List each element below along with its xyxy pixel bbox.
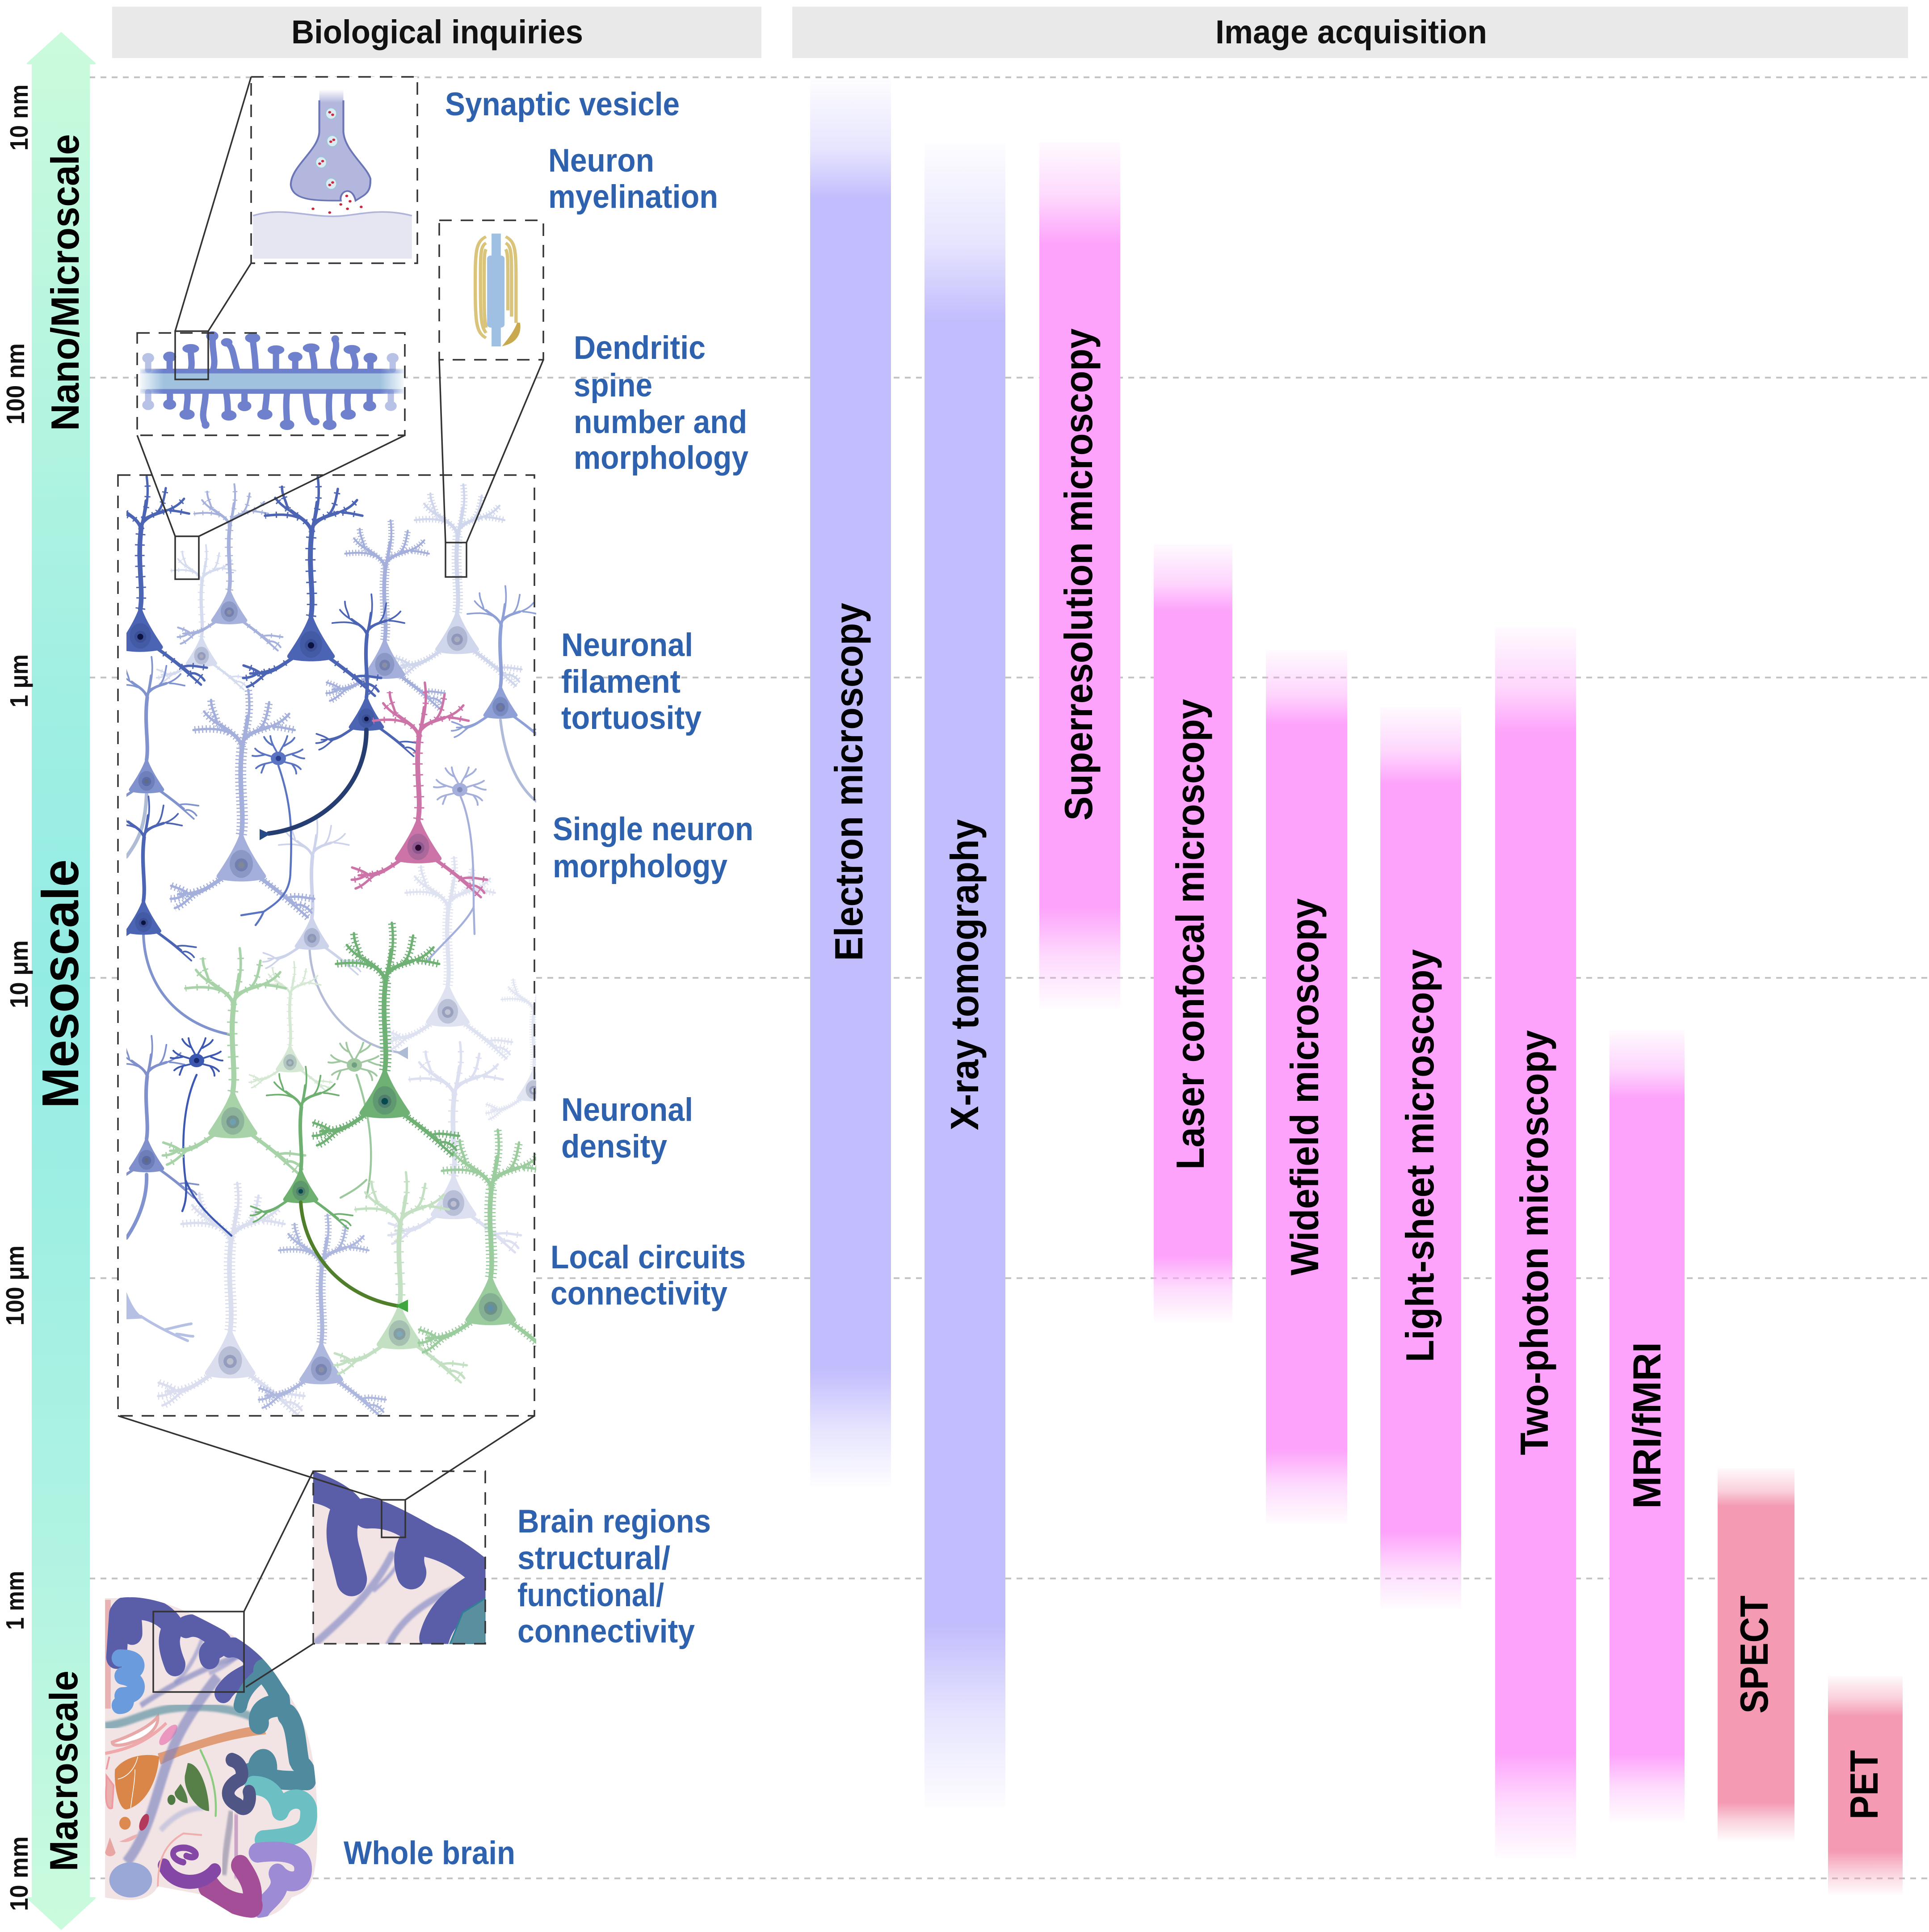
scale labels: 100 μm — [1, 1246, 29, 1326]
scale range labels: Macroscale — [42, 1671, 86, 1871]
label: dendritic spine number and morphology — [574, 330, 748, 476]
scale labels — [1, 84, 34, 1911]
label: neuronal density: Neuronal — [561, 1092, 693, 1128]
bar: two-photon microscopy: Two-photon microscopy — [1512, 1030, 1556, 1455]
inset: dendritic spines — [137, 332, 405, 435]
label: neuronal density — [561, 1092, 693, 1165]
header: image acquisition: Image acquisition — [1215, 13, 1487, 51]
scale labels: 1 mm — [1, 1571, 29, 1630]
label: neuronal filament tortuosity: Neuronal — [561, 627, 693, 663]
bar: electron microscopy — [810, 79, 891, 1486]
label: neuron myelination: Neuron — [548, 143, 654, 179]
label: dendritic spine number and morphology: number and — [574, 404, 747, 440]
bar: two-photon microscopy — [1495, 627, 1576, 1858]
label: neuron myelination — [548, 143, 718, 215]
label: whole brain: Whole brain — [344, 1835, 515, 1871]
label: local circuits connectivity — [551, 1239, 746, 1312]
label: local circuits connectivity: Local circuits — [551, 1239, 746, 1275]
axon and neurons: faded background population — [126, 484, 583, 1416]
bar: X-ray tomography: X-ray tomography — [942, 819, 987, 1130]
scale labels: 100 nm — [1, 343, 30, 425]
bar: superresolution microscopy: Superresolution microscopy — [1056, 328, 1101, 821]
header: biological inquiries — [112, 7, 761, 58]
bar: superresolution microscopy — [1039, 142, 1120, 1009]
bar: PET — [1828, 1676, 1903, 1894]
bar: light-sheet microscopy: Light-sheet microscopy — [1398, 949, 1442, 1362]
inset: neuron myelination — [439, 220, 543, 360]
label: local circuits connectivity: connectivity — [551, 1275, 727, 1312]
bar: widefield microscopy: Widefield microscopy — [1282, 898, 1327, 1275]
label: dendritic spine number and morphology: spine — [574, 367, 652, 404]
header: image acquisition — [792, 7, 1908, 58]
label: single neuron morphology: Single neuron — [553, 811, 753, 847]
bar: MRI/fMRI — [1610, 1030, 1685, 1822]
scale range labels — [31, 134, 89, 1871]
long-range axon: navy arrow — [260, 730, 366, 840]
bar: laser confocal microscopy: Laser confocal microscopy — [1168, 699, 1212, 1170]
bar: SPECT — [1718, 1468, 1795, 1841]
bar: electron microscopy: Electron microscopy — [827, 603, 871, 961]
label: dendritic spine number and morphology: morphology — [574, 440, 748, 476]
scale labels: 10 μm — [5, 940, 34, 1008]
label: dendritic spine number and morphology: Dendritic — [574, 330, 706, 366]
label: brain regions structural/functional connectivity: Brain regions — [517, 1503, 711, 1540]
bar: X-ray tomography — [925, 143, 1005, 1807]
label: single neuron morphology: morphology — [553, 848, 727, 884]
scale labels: 1 μm — [5, 654, 34, 707]
zoom guide lines — [118, 77, 543, 1687]
bar: PET: PET — [1842, 1750, 1886, 1819]
scale range labels: Mesoscale — [31, 859, 89, 1108]
label: synaptic vesicle: Synaptic vesicle — [445, 86, 680, 122]
long-range axon: green arrow — [301, 1202, 408, 1312]
inset: synaptic vesicle — [251, 77, 417, 263]
scale labels: 10 mm — [5, 1836, 34, 1911]
label: neuron myelination: myelination — [548, 179, 718, 215]
neuron network panel — [117, 474, 536, 1417]
whole brain section — [101, 1593, 323, 1923]
label: single neuron morphology — [553, 811, 753, 884]
label: brain regions structural/functional connectivity — [517, 1503, 711, 1650]
bar: laser confocal microscopy — [1154, 544, 1232, 1322]
blue and pink neurons — [76, 477, 551, 1238]
label: neuronal density: density — [561, 1128, 667, 1165]
label: neuronal filament tortuosity — [561, 627, 702, 736]
interneurons — [171, 736, 486, 1236]
label: neuronal filament tortuosity: tortuosity — [561, 700, 702, 736]
bar: SPECT: SPECT — [1732, 1595, 1776, 1713]
scale labels: 10 nm — [5, 84, 34, 151]
scale axis double arrow — [28, 33, 95, 1929]
scale range labels: Nano/Microscale — [43, 134, 87, 431]
bar: MRI/fMRI: MRI/fMRI — [1625, 1342, 1669, 1509]
bottom-left clipped neuron — [126, 1292, 193, 1341]
label: brain regions structural/functional connectivity: functional/ — [517, 1577, 664, 1613]
inset: brain cortex region — [309, 1471, 491, 1645]
header: biological inquiries: Biological inquiries — [291, 13, 583, 51]
bar: light-sheet microscopy — [1380, 707, 1461, 1609]
label: brain regions structural/functional connectivity: connectivity — [517, 1613, 695, 1650]
label: brain regions structural/functional connectivity: structural/ — [517, 1540, 670, 1576]
label: neuronal filament tortuosity: filament — [561, 664, 681, 700]
bar: widefield microscopy — [1266, 650, 1347, 1524]
green neurons — [163, 923, 565, 1382]
